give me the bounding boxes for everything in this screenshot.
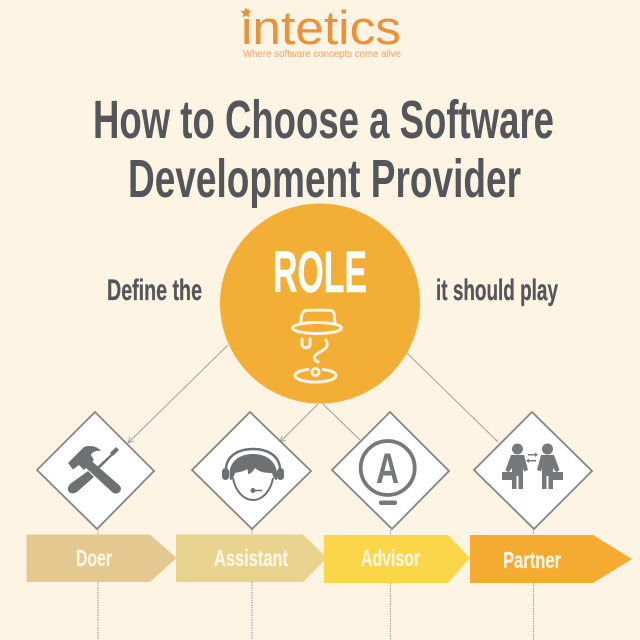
diamond: doer (37, 412, 154, 529)
text: it should play: it should play (436, 274, 558, 307)
arrow: advisor: Advisor (361, 545, 420, 571)
icon: hammer and screwdriver (68, 446, 121, 494)
arrow: assistant (176, 534, 327, 582)
diamond: assistant (192, 412, 311, 529)
icon: two business people (502, 444, 563, 489)
icon: lettered bulb: A (376, 445, 399, 493)
arrow: partner (470, 535, 632, 583)
arrow: doer: Doer (76, 545, 112, 571)
text: Define the: Define the (107, 274, 202, 307)
icon: headset operator (222, 449, 284, 500)
connector lines (128, 345, 498, 443)
diamond: partner (474, 412, 592, 529)
arrow: partner: Partner (503, 547, 561, 573)
arrow: assistant: Assistant (214, 545, 288, 571)
diamond: advisor (332, 412, 449, 529)
logo: intetics: Where software concepts come alive (243, 48, 401, 60)
logo: intetics: intetics (241, 1, 401, 54)
dotted stems (98, 530, 534, 640)
circle: role: ROLE (273, 240, 367, 305)
arrow: doer (26, 534, 176, 582)
arrow: advisor (324, 535, 470, 583)
icon: hat with question mark (292, 310, 342, 382)
title (93, 90, 554, 209)
circle: role (220, 204, 420, 404)
